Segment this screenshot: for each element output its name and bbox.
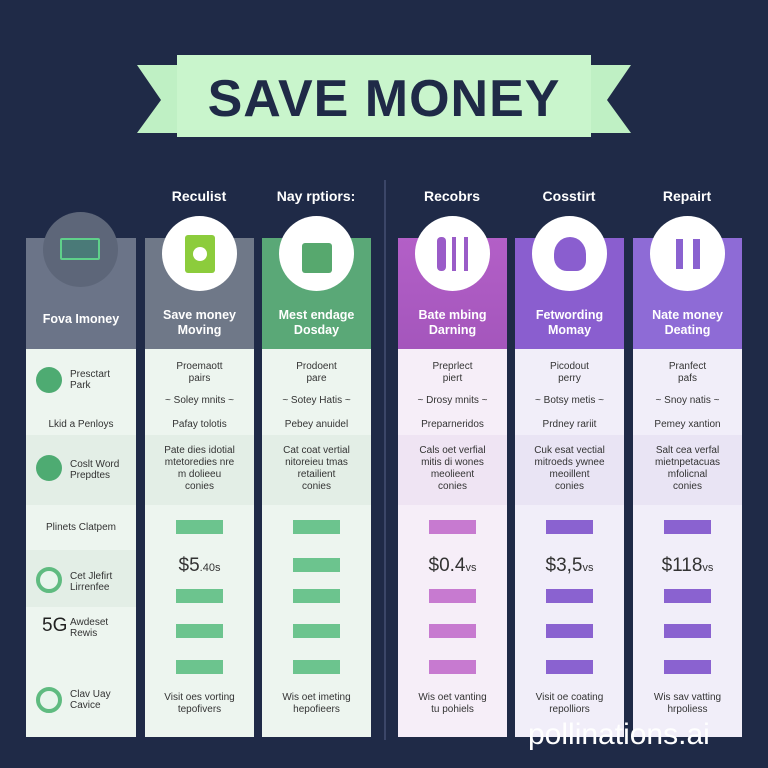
panel: column 3: Dosday bbox=[294, 323, 339, 337]
panel: column 4: Bate mbing bbox=[418, 308, 487, 322]
icon: head bbox=[532, 216, 607, 291]
panel: column 1 labels: Clav Uay bbox=[70, 689, 111, 700]
panel: column 3: Prodoent bbox=[296, 361, 337, 372]
panel: column 6: Nate money bbox=[652, 308, 723, 322]
panel: column 1 labels: Presctart bbox=[70, 369, 110, 380]
panel: column 2: $5.40s bbox=[179, 555, 220, 576]
panel: column 3 bbox=[262, 216, 371, 737]
panel: column 3: pare bbox=[306, 373, 326, 384]
column headings bbox=[172, 188, 711, 204]
panel: column 3: ~ Sotey Hatis ~ bbox=[282, 395, 351, 406]
panel: column 4: conies bbox=[438, 481, 467, 492]
panel: column 5: repolliors bbox=[549, 704, 590, 715]
panel: column 5: Picodout bbox=[550, 361, 589, 372]
divider bbox=[384, 180, 386, 740]
panel: column 1 labels: Cet Jlefirt bbox=[70, 571, 112, 582]
panel: column 5 bbox=[515, 216, 624, 737]
panel: column 6: Pemey xantion bbox=[654, 419, 721, 430]
panel: column 6: hrpoliess bbox=[667, 704, 708, 715]
panel: column 5: Visit oe coating bbox=[536, 692, 603, 703]
panel: column 3: Mest endage bbox=[279, 308, 354, 322]
panel: column 1 labels: 5G bbox=[42, 615, 67, 636]
panel: column 2: Pafay tolotis bbox=[172, 419, 227, 430]
panel: column 2: Pate dies idotial bbox=[164, 445, 235, 456]
column headings: Nay rptiors: bbox=[277, 188, 355, 204]
panel: column 4: meolieent bbox=[431, 469, 474, 480]
panel: column 6: pafs bbox=[678, 373, 697, 384]
panel: column 1 labels: Coslt Word bbox=[70, 459, 119, 470]
panel: column 3: Cat coat vertial bbox=[283, 445, 350, 456]
panel: column 2: m dolieeu bbox=[178, 469, 221, 480]
icon: receipt bbox=[162, 216, 237, 291]
panel: column 3: Pebey anuidel bbox=[285, 419, 348, 430]
icon: bill bbox=[60, 238, 100, 260]
panel: column 4: tu pohiels bbox=[431, 704, 474, 715]
panel: column 3: hepofieers bbox=[293, 704, 340, 715]
panel: column 6: ~ Snoy natis ~ bbox=[656, 395, 719, 406]
icon: bag bbox=[279, 216, 354, 291]
panel: column 1 labels: Cavice bbox=[70, 700, 101, 711]
panel: column 5: Prdney rariit bbox=[543, 419, 596, 430]
panel: column 1 labels: Lkid a Penloys bbox=[48, 419, 114, 430]
panel: column 1 labels: Lirrenfee bbox=[70, 582, 109, 593]
panel: column 4: piert bbox=[443, 373, 462, 384]
panel: column 3: nitoreieu tmas bbox=[285, 457, 348, 468]
column headings: Reculist bbox=[172, 188, 226, 204]
panel: column 1 labels: Plinets Clatpem bbox=[46, 522, 116, 533]
panel: column 2: tepofivers bbox=[178, 704, 221, 715]
panel: column 1 labels: Rewis bbox=[70, 628, 97, 639]
panel: column 4: mitis di wones bbox=[421, 457, 484, 468]
panel: column 5: perry bbox=[558, 373, 581, 384]
panel: column 2: pairs bbox=[189, 373, 210, 384]
panel: column 6: $118vs bbox=[662, 555, 713, 576]
panel: column 6: Pranfect bbox=[669, 361, 706, 372]
panel: column 5: Cuk esat vectial bbox=[534, 445, 605, 456]
panel: column 3: Wis oet imeting bbox=[282, 692, 351, 703]
panel: column 1 labels: Prepdtes bbox=[70, 470, 110, 481]
icon: tools bbox=[650, 216, 725, 291]
panel: column 5: Fetwording bbox=[536, 308, 603, 322]
panel: column 4: Darning bbox=[429, 323, 476, 337]
watermark: pollinations.ai bbox=[528, 718, 710, 751]
panel: column 2: Visit oes vorting bbox=[164, 692, 235, 703]
panel: column 6 bbox=[633, 216, 742, 737]
panel: column 2: Moving bbox=[178, 323, 221, 337]
panel: column 1 labels bbox=[26, 212, 136, 737]
panel: column 4: Cals oet verfial bbox=[419, 445, 486, 456]
panel: column 5: meoillent bbox=[549, 469, 590, 480]
panel: column 3: retailient bbox=[298, 469, 335, 480]
panel: column 4: $0.4vs bbox=[428, 555, 476, 576]
panel: column 6: mietnpetacuas bbox=[655, 457, 720, 468]
panel: column 5: Momay bbox=[548, 323, 591, 337]
panel: column 5: mitroeds ywnee bbox=[534, 457, 605, 468]
title text: SAVE MONEY bbox=[208, 70, 560, 128]
title banner bbox=[137, 55, 631, 137]
column headings: Recobrs bbox=[424, 188, 480, 204]
panel: column 4: Preprlect bbox=[432, 361, 472, 372]
panel: column 2: mtetoredies nre bbox=[165, 457, 234, 468]
panel: column 5: ~ Botsy metis ~ bbox=[535, 395, 604, 406]
panel: column 4: ~ Drosy mnits ~ bbox=[417, 395, 488, 406]
panel: column 1 labels: Park bbox=[70, 380, 91, 391]
panel: column 6: conies bbox=[673, 481, 702, 492]
panel: column 2: Save money bbox=[163, 308, 236, 322]
panel: column 6: Deating bbox=[665, 323, 710, 337]
panel: column 6: mfolicnal bbox=[668, 469, 707, 480]
panel: column 4 bbox=[398, 216, 507, 737]
column headings: Cosstirt bbox=[543, 188, 595, 204]
panel: column 5: $3,5vs bbox=[546, 555, 593, 576]
panel: column 1 labels: Fova Imoney bbox=[43, 312, 119, 326]
panel: column 1 labels: Awdeset bbox=[70, 617, 108, 628]
icon: utensils bbox=[415, 216, 490, 291]
column headings: Repairt bbox=[663, 188, 711, 204]
panel: column 2: Proemaott bbox=[176, 361, 223, 372]
panel: column 6: Salt cea verfal bbox=[656, 445, 719, 456]
panel: column 4: Preparneridos bbox=[421, 419, 484, 430]
panel: column 2: conies bbox=[185, 481, 214, 492]
panel: column 2 bbox=[145, 216, 254, 737]
panel: column 4: Wis oet vanting bbox=[418, 692, 487, 703]
panel: column 6: Wis sav vatting bbox=[654, 692, 721, 703]
panel: column 5: conies bbox=[555, 481, 584, 492]
panel: column 2: ~ Soley mnits ~ bbox=[165, 395, 234, 406]
panel: column 3: conies bbox=[302, 481, 331, 492]
